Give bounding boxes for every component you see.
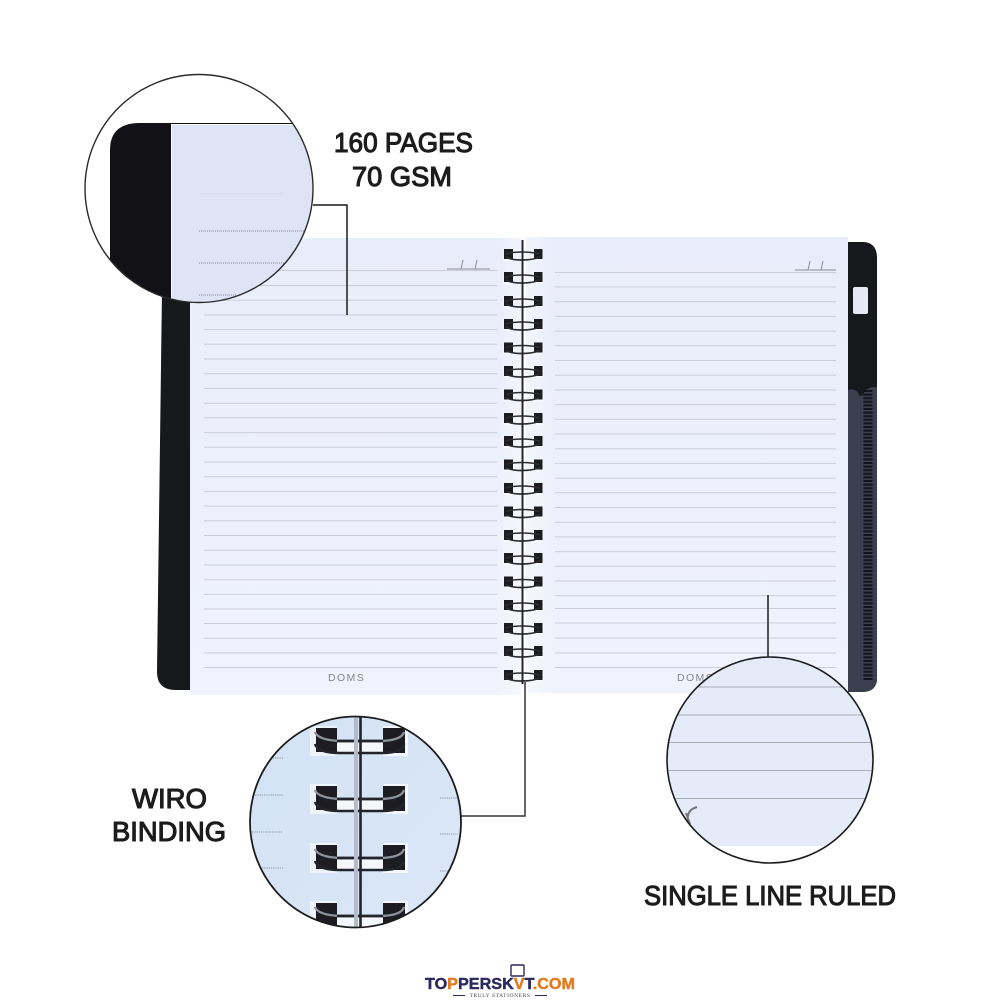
lens: page corner bbox=[85, 74, 322, 320]
right page ruled lines bbox=[555, 272, 836, 668]
tagline: TRULY STATIONERS bbox=[469, 993, 531, 999]
binding highlight left bbox=[496, 238, 521, 695]
pocket stitching bbox=[864, 390, 872, 680]
left page ruled lines bbox=[204, 270, 497, 668]
leader: binding callout bbox=[461, 682, 525, 816]
label: single line ruled: SINGLE LINE RULED bbox=[644, 880, 896, 911]
label slot bbox=[853, 287, 868, 314]
elastic pen pocket bbox=[848, 387, 877, 692]
right cover with pocket bbox=[846, 242, 877, 692]
leader: ruled callout bbox=[767, 595, 769, 658]
date mark left bbox=[447, 260, 490, 269]
logo: toppers kit: TOPPERSKVT.COM bbox=[425, 976, 575, 993]
label: wiro binding bbox=[112, 783, 226, 847]
lens: ruled lines bbox=[660, 650, 880, 863]
brand mark right: DOMS bbox=[677, 672, 714, 684]
date mark right bbox=[795, 261, 836, 270]
lens: wire binding bbox=[250, 716, 461, 931]
left page bbox=[190, 238, 521, 695]
leader: pages callout bbox=[313, 205, 347, 315]
brand mark left: DOMS bbox=[328, 672, 365, 684]
logo: toppers kit bbox=[425, 965, 575, 999]
binding highlight right bbox=[526, 237, 554, 693]
label: 160 pages 70 gsm: 160 PAGES bbox=[334, 127, 473, 158]
left cover bbox=[157, 290, 192, 690]
icon: pencil bbox=[511, 965, 524, 976]
right page bbox=[526, 237, 848, 693]
label: 160 pages 70 gsm: 70 GSM bbox=[352, 161, 452, 192]
spiral binding bbox=[504, 240, 543, 684]
label: 160 pages 70 gsm bbox=[334, 127, 473, 192]
notebook bbox=[157, 237, 877, 695]
tagline rules bbox=[453, 994, 547, 996]
label: wiro binding: WIRO bbox=[132, 783, 207, 814]
label: wiro binding: BINDING bbox=[112, 816, 226, 847]
